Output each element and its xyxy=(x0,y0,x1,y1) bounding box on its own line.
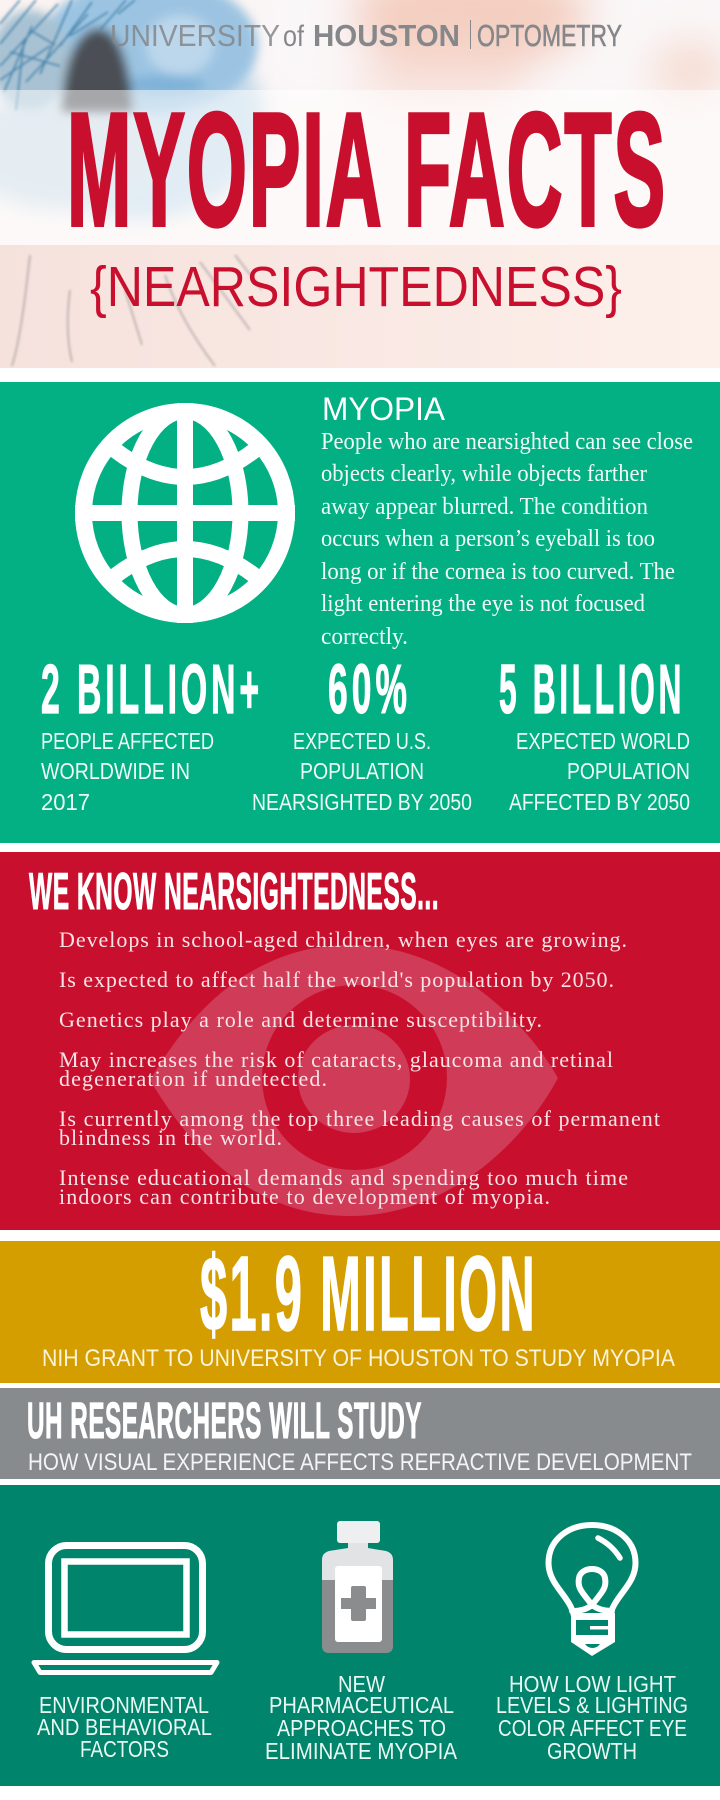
stat: 2 billion: PEOPLE AFFECTED xyxy=(41,728,214,754)
text block: definition xyxy=(321,429,693,650)
text block: definition: long or if the cornea is too curved. The xyxy=(321,559,675,585)
icon: eye watermark xyxy=(150,945,558,1216)
logo: University of Houston Optometry: of xyxy=(283,20,305,53)
label: low light: LEVELS & LIGHTING xyxy=(496,1692,688,1718)
text block: facts: Develops in school-aged children, when eyes are growing. xyxy=(59,927,627,952)
stat: 60%: NEARSIGHTED BY 2050 xyxy=(252,789,472,815)
text block: definition: light entering the eye is not focused xyxy=(321,591,645,617)
panel: NIH grant xyxy=(0,1235,720,1383)
label: pharmaceutical approaches xyxy=(265,1671,458,1764)
icon: light bulb xyxy=(548,1525,636,1656)
label: low light xyxy=(496,1671,688,1764)
icon: medicine bottle xyxy=(322,1521,393,1653)
text block: facts: degeneration if undetected. xyxy=(59,1066,327,1091)
label: environmental factors: FACTORS xyxy=(80,1736,169,1762)
stat: 5 billion xyxy=(499,650,690,815)
subtitle: {NEARSIGHTEDNESS} xyxy=(90,255,622,319)
icon: laptop xyxy=(34,1546,217,1672)
text block: facts xyxy=(59,927,660,1209)
stat: 60%: 60% xyxy=(328,650,411,728)
text block: definition: People who are nearsighted can see close xyxy=(321,429,693,455)
text block: facts: Intense educational demands and spending too much time xyxy=(59,1165,628,1190)
text block: facts: indoors can contribute to development of myopia. xyxy=(59,1184,550,1209)
panel: UH researchers xyxy=(0,1388,720,1479)
stat: 60%: POPULATION xyxy=(300,758,424,784)
translucent title band xyxy=(0,90,720,245)
stat: 2 billion: 2017 xyxy=(41,789,90,815)
label: environmental factors: ENVIRONMENTAL xyxy=(39,1692,209,1718)
panel: myopia definition and stats xyxy=(0,382,720,843)
logo: University of Houston Optometry: UNIVERSITY xyxy=(110,18,280,53)
label: pharmaceutical approaches: PHARMACEUTICAL xyxy=(269,1692,454,1718)
heading: Myopia: MYOPIA xyxy=(322,391,446,427)
text block: facts: blindness in the world. xyxy=(59,1125,282,1150)
text block: facts: Is currently among the top three leading causes of permanent xyxy=(59,1106,660,1131)
stat: 5 billion: POPULATION xyxy=(567,758,690,784)
label: low light: COLOR AFFECT EYE xyxy=(498,1715,687,1741)
text block: definition: occurs when a person’s eyeball is too xyxy=(321,526,655,552)
logo: University of Houston Optometry: OPTOMETRY xyxy=(477,18,622,53)
panel: we know nearsightedness xyxy=(0,852,720,1230)
panel: myopia definition and stats: 2 BILLION+ xyxy=(41,650,263,728)
label: environmental factors: AND BEHAVIORAL xyxy=(37,1714,212,1740)
logo: University of Houston Optometry xyxy=(110,18,622,53)
stat: 60% xyxy=(252,650,472,815)
label: pharmaceutical approaches: NEW xyxy=(338,1671,385,1697)
text block: definition: correctly. xyxy=(321,624,408,650)
label: low light: GROWTH xyxy=(547,1738,637,1764)
stat: 2 billion xyxy=(41,650,263,815)
text block: facts: Genetics play a role and determine susceptibility. xyxy=(59,1007,542,1032)
label: pharmaceutical approaches: APPROACHES TO xyxy=(277,1715,446,1741)
text block: definition: away appear blurred. The condition xyxy=(321,494,648,520)
stat: 2 billion: WORLDWIDE IN xyxy=(41,758,190,784)
icon: globe xyxy=(75,403,295,623)
text block: definition: objects clearly, while objects farther xyxy=(321,461,647,487)
logo: University of Houston Optometry: HOUSTON xyxy=(313,18,460,53)
text block: facts: Is expected to affect half the world's population by 2050. xyxy=(59,967,614,992)
label: pharmaceutical approaches: ELIMINATE MYOPIA xyxy=(265,1738,458,1764)
label: low light: HOW LOW LIGHT xyxy=(509,1671,676,1697)
stat: 60%: EXPECTED U.S. xyxy=(293,728,431,754)
panel: research areas xyxy=(0,1485,720,1786)
header panel xyxy=(0,0,720,368)
stat: 5 billion: AFFECTED BY 2050 xyxy=(509,789,690,815)
blurred eye photo background xyxy=(0,0,720,368)
label: environmental factors xyxy=(37,1692,212,1762)
text block: facts: May increases the risk of cataracts, glaucoma and retinal xyxy=(59,1047,613,1072)
